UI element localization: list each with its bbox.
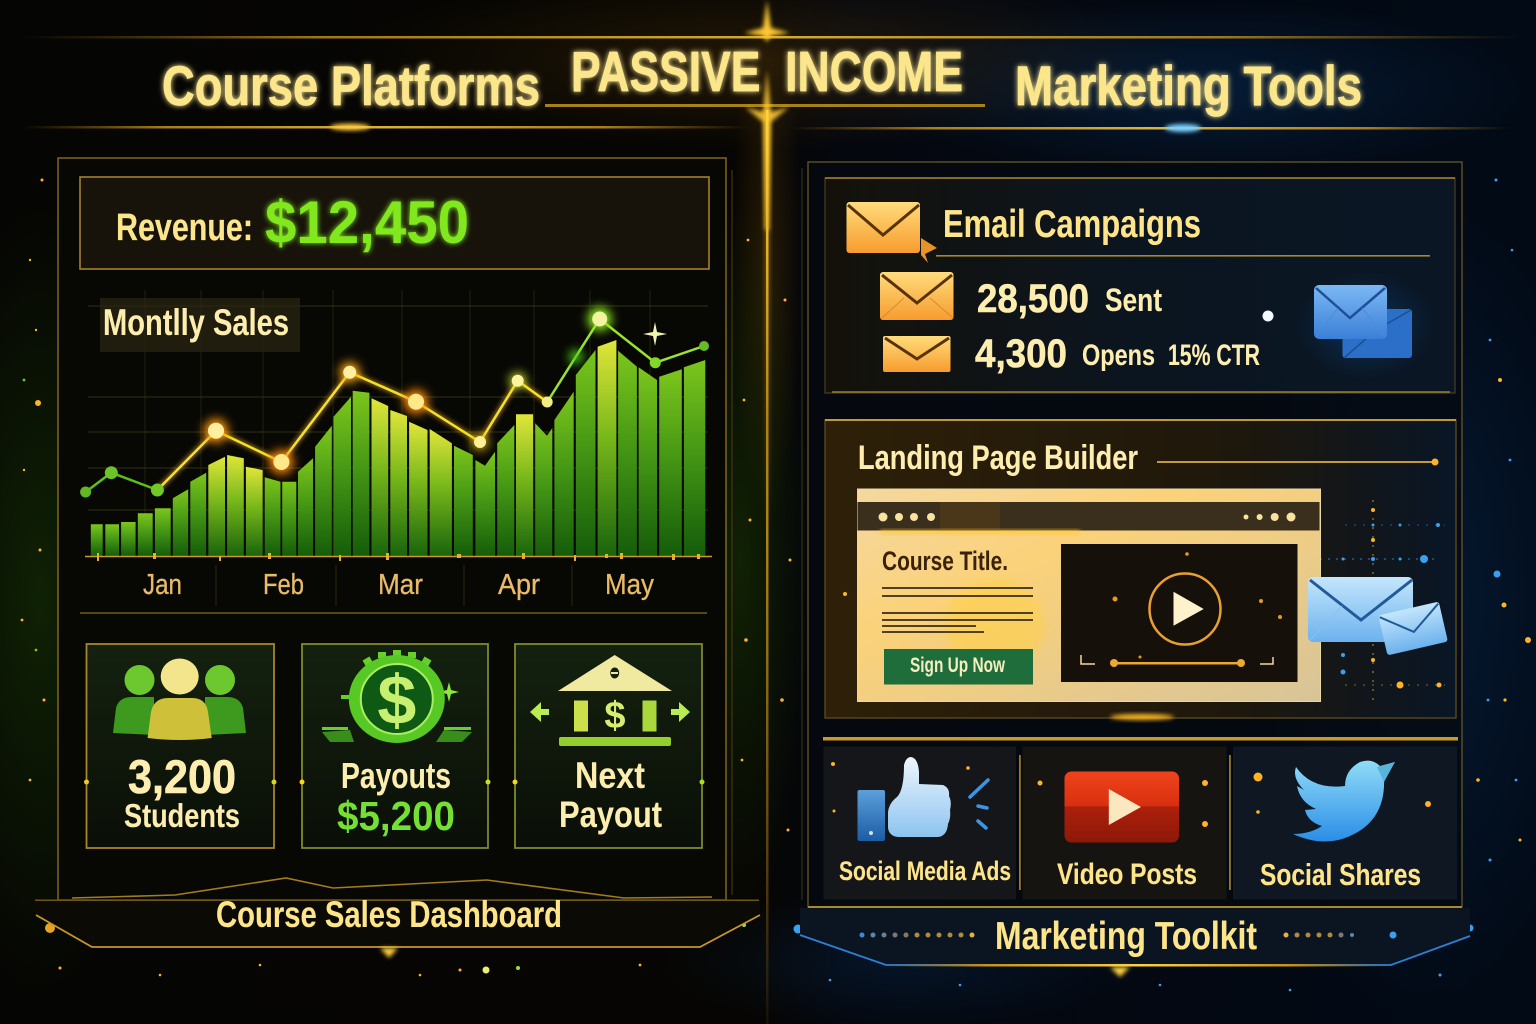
chart label: Montlly Sales <box>103 302 289 343</box>
bars <box>91 340 705 556</box>
card: students <box>84 644 276 848</box>
card: next payout: Next <box>575 755 645 796</box>
top frame lines <box>20 0 1520 132</box>
month labels: Apr <box>498 569 540 601</box>
month labels: Jan <box>143 569 182 601</box>
icon: floating envelopes <box>1308 577 1448 655</box>
panel: email campaigns: Opens <box>1082 339 1155 372</box>
panel: marketing tools <box>800 162 1470 977</box>
panel: social tools: Social Shares <box>1260 857 1421 892</box>
particles: right <box>780 178 1531 991</box>
center divider <box>745 70 789 1024</box>
panel: social tools: Video Posts <box>1057 858 1197 891</box>
axis <box>85 553 712 561</box>
panel: landing page builder <box>825 420 1456 720</box>
card: payouts <box>300 644 490 848</box>
panel: email campaigns: 4,300 <box>975 332 1067 376</box>
sales line <box>80 307 709 498</box>
icon: blue envelopes <box>1295 270 1435 380</box>
video player <box>1061 544 1298 682</box>
card: students: Students <box>124 797 240 834</box>
month labels: Feb <box>263 569 304 601</box>
icon: thumbs up <box>858 757 988 841</box>
footer: course sales dashboard <box>35 878 760 958</box>
revenue box: $12,450 <box>265 189 469 256</box>
panel: landing page builder: Landing Page Builder <box>858 439 1138 477</box>
chart label <box>100 298 300 352</box>
chart grid <box>88 290 708 556</box>
icon: dollar coin <box>322 650 472 743</box>
month labels: May <box>605 569 654 601</box>
footer: marketing toolkit: Marketing Toolkit <box>995 915 1257 958</box>
icon: opens envelope <box>883 336 950 372</box>
icon: dollar coin: $ <box>377 661 416 739</box>
panel: email campaigns: Email Campaigns <box>943 203 1201 246</box>
panel: email campaigns <box>825 178 1455 393</box>
chart: monthly sales <box>80 290 712 601</box>
title: center: PASSIVE INCOME <box>571 40 963 104</box>
browser mockup: Course Title. <box>882 546 1008 576</box>
panel: email campaigns: 15% CTR <box>1168 339 1260 372</box>
footer: marketing toolkit <box>800 908 1470 977</box>
panel: social tools <box>808 737 1462 908</box>
icon: bank: $ <box>604 695 626 737</box>
card: next payout: Payout <box>559 794 662 835</box>
icon: bank <box>530 655 690 746</box>
icon: video play <box>1064 772 1179 842</box>
month labels: Mar <box>378 569 423 601</box>
button: sign up now <box>884 649 1033 684</box>
panel: email campaigns: Sent <box>1105 282 1162 318</box>
browser mockup <box>858 489 1320 702</box>
card: students: 3,200 <box>128 750 236 803</box>
title: marketing tools: Marketing Tools <box>1015 54 1362 117</box>
button: sign up now: Sign Up Now <box>910 654 1005 677</box>
particles: left <box>21 178 752 976</box>
icon: people <box>113 658 246 740</box>
card: next payout <box>512 644 704 848</box>
icon: bird <box>1293 761 1395 842</box>
icon: heading envelope <box>846 202 937 263</box>
panel: social tools: Social Media Ads <box>839 856 1011 886</box>
footer: course sales dashboard: Course Sales Dashboard <box>216 894 562 935</box>
panel: email campaigns: 28,500 <box>977 277 1089 321</box>
card: payouts: $5,200 <box>337 793 455 839</box>
icon: sent envelope <box>880 272 954 320</box>
decorative data dots <box>843 500 1445 700</box>
panel: course sales dashboard <box>35 158 760 958</box>
title: course platforms: Course Platforms <box>162 54 540 117</box>
revenue box <box>80 177 709 269</box>
month labels <box>143 569 654 601</box>
card: payouts: Payouts <box>341 755 451 796</box>
revenue box: Revenue: <box>116 207 253 249</box>
